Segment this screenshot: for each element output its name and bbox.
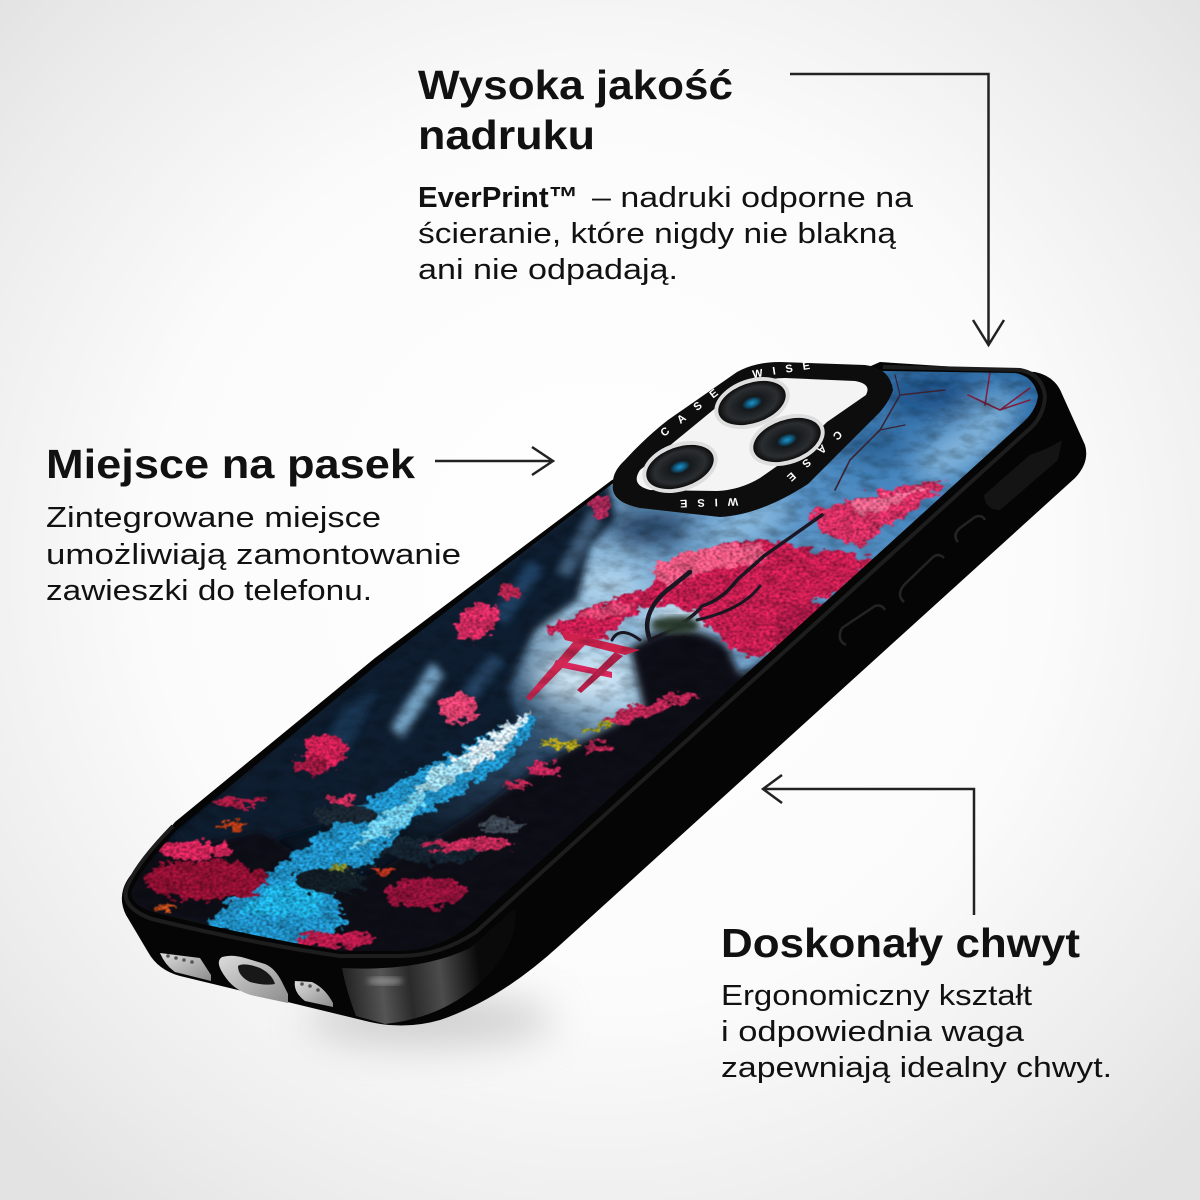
cliff highlights	[322, 505, 602, 755]
arrow: strap slot	[435, 447, 553, 475]
body text: ani nie odpadają.	[418, 254, 678, 286]
tree lichen	[651, 616, 699, 634]
clouds	[537, 377, 1026, 702]
cherry tree	[548, 480, 946, 656]
side buttons	[840, 516, 985, 645]
heading: Doskonały chwyt	[721, 920, 1080, 966]
island glass	[637, 378, 868, 491]
camera island	[613, 358, 893, 517]
arrow: print quality	[790, 74, 1004, 345]
case body	[122, 362, 1086, 1026]
dark cliffs	[132, 484, 770, 951]
body text: – nadruki odporne na	[592, 182, 914, 214]
lens	[742, 405, 832, 475]
tree trunk	[612, 372, 1030, 640]
body text: zapewniają idealny chwyt.	[721, 1052, 1112, 1084]
side switch	[984, 440, 1062, 510]
camera island: WISE	[752, 358, 821, 381]
callout: strap slot	[46, 441, 461, 607]
camera island: WISE	[670, 495, 738, 509]
body text: ścieranie, które nigdy nie blakną	[418, 218, 897, 250]
island ring	[613, 362, 893, 517]
bottom gloss	[342, 908, 516, 1024]
torii gate	[526, 631, 640, 701]
phone shadow	[305, 994, 555, 1046]
heading: nadruku	[418, 112, 595, 158]
heading: Miejsce na pasek	[46, 441, 415, 487]
USB port	[219, 956, 288, 1003]
river	[205, 712, 540, 950]
charging port area	[160, 953, 333, 1007]
lens	[707, 368, 797, 438]
body text: zawieszki do telefonu.	[46, 575, 372, 607]
brand: top: CASE	[658, 379, 731, 439]
brand: bottom: CASE	[775, 428, 844, 492]
rim highlight	[126, 367, 1045, 956]
heading: Wysoka jakość	[418, 62, 733, 108]
callout: print quality	[418, 62, 914, 286]
body text: umożliwiają zamontowanie	[46, 539, 461, 571]
foliage	[143, 492, 700, 948]
rocks	[292, 805, 522, 894]
body text: i odpowiednia waga	[721, 1016, 1025, 1048]
body text: Zintegrowane miejsce	[46, 502, 381, 534]
printed artwork	[132, 371, 1038, 951]
phone case	[122, 362, 1086, 1026]
callout: grip	[721, 920, 1112, 1084]
sky	[155, 371, 1038, 933]
arrow: grip	[763, 775, 974, 915]
body text: Ergonomiczny kształt	[721, 980, 1032, 1012]
lens	[635, 432, 725, 502]
speaker right	[295, 981, 333, 1007]
gloss streak	[367, 977, 403, 985]
body text: EverPrint™	[418, 182, 578, 214]
speaker left	[160, 953, 211, 981]
